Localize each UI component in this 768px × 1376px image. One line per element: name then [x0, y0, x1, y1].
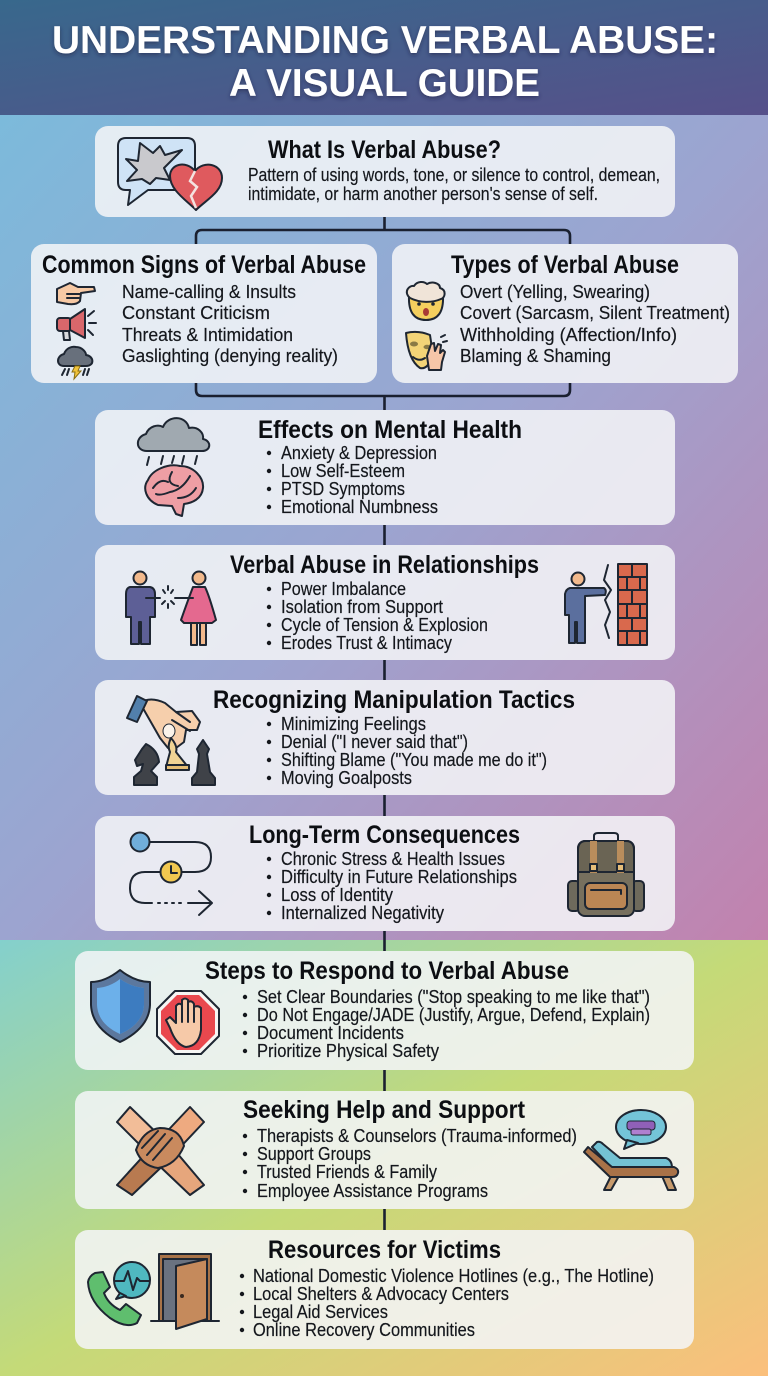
signs list: Gaslighting (denying reality)	[122, 346, 338, 366]
icon: mask and hand	[406, 332, 447, 370]
icon: pointing hand	[57, 283, 95, 304]
heading: Recognizing Manipulation Tactics	[213, 686, 575, 714]
types list: Blaming & Shaming	[460, 346, 611, 366]
panel: relationships	[95, 545, 675, 660]
types list: Covert (Sarcasm, Silent Treatment)	[460, 303, 730, 323]
heading: Steps to Respond to Verbal Abuse	[205, 957, 569, 985]
signs list: Name-calling & Insults	[122, 282, 296, 302]
consequences list	[267, 849, 517, 923]
connectors between panels	[196, 217, 570, 1230]
signs list	[122, 282, 338, 366]
steps list: Do Not Engage/JADE (Justify, Argue, Defend, Explain)	[257, 1005, 650, 1025]
support list: Trusted Friends & Family	[257, 1162, 437, 1182]
heading: Long-Term Consequences	[249, 821, 520, 849]
consequences list: Internalized Negativity	[281, 903, 444, 923]
background: lower section	[0, 940, 768, 1376]
panel: manipulation tactics	[95, 680, 675, 795]
definition text	[248, 165, 660, 204]
icon: exploding head	[407, 282, 445, 320]
definition text: intimidate, or harm another person's sense of self.	[248, 184, 598, 204]
consequences list: Chronic Stress & Health Issues	[281, 849, 505, 869]
header band	[0, 0, 768, 115]
icon: stop hand	[157, 991, 219, 1054]
icon: person facing brick wall	[565, 564, 647, 645]
steps list: Prioritize Physical Safety	[257, 1041, 439, 1061]
panel: steps to respond	[75, 951, 694, 1070]
icon: therapy couch with thought bubble	[584, 1110, 678, 1190]
icon: phone with heartbeat bubble	[88, 1262, 150, 1325]
steps list	[243, 987, 650, 1061]
panel: types	[392, 244, 738, 383]
resources list: Legal Aid Services	[253, 1302, 388, 1322]
tactics list: Minimizing Feelings	[281, 714, 426, 734]
panel: common signs	[31, 244, 377, 383]
types list: Withholding (Affection/Info)	[460, 325, 677, 345]
background: upper section	[0, 115, 768, 940]
tactics list: Shifting Blame ("You made me do it")	[281, 750, 547, 770]
icon: rain cloud over brain	[138, 418, 209, 516]
effects list: Emotional Numbness	[281, 497, 438, 517]
icon: heavy backpack	[568, 833, 644, 916]
title	[52, 19, 718, 105]
panel: what is verbal abuse	[95, 126, 675, 217]
relationships list: Power Imbalance	[281, 579, 406, 599]
support list: Therapists & Counselors (Trauma-informed)	[257, 1126, 577, 1146]
heading: What Is Verbal Abuse?	[268, 136, 501, 164]
support list: Employee Assistance Programs	[257, 1181, 488, 1201]
steps list: Document Incidents	[257, 1023, 404, 1043]
title: UNDERSTANDING VERBAL ABUSE:	[52, 19, 718, 62]
icon: storm cloud	[58, 347, 92, 379]
resources list: Online Recovery Communities	[253, 1320, 475, 1340]
heading: Effects on Mental Health	[258, 416, 522, 444]
support list	[243, 1126, 577, 1201]
panel: seeking help	[75, 1091, 694, 1209]
icon: shield	[91, 970, 150, 1042]
relationships list: Erodes Trust & Intimacy	[281, 633, 452, 653]
heading: Common Signs of Verbal Abuse	[42, 251, 366, 279]
effects list: Anxiety & Depression	[281, 443, 437, 463]
relationships list: Isolation from Support	[281, 597, 443, 617]
icon: clasped hands	[117, 1107, 204, 1195]
icon: speech bubble with burst and broken heart	[118, 138, 222, 210]
effects list: Low Self-Esteem	[281, 461, 405, 481]
relationships list: Cycle of Tension & Explosion	[281, 615, 488, 635]
tactics list	[267, 714, 547, 788]
support list: Support Groups	[257, 1144, 371, 1164]
consequences list: Difficulty in Future Relationships	[281, 867, 517, 887]
consequences list: Loss of Identity	[281, 885, 393, 905]
heading: Types of Verbal Abuse	[451, 251, 679, 279]
definition text: Pattern of using words, tone, or silence to control, demean,	[248, 165, 660, 185]
signs list: Constant Criticism	[122, 303, 270, 323]
resources list: Local Shelters & Advocacy Centers	[253, 1284, 509, 1304]
types list: Overt (Yelling, Swearing)	[460, 282, 650, 302]
tactics list: Denial ("I never said that")	[281, 732, 468, 752]
effects list	[267, 443, 438, 517]
effects list: PTSD Symptoms	[281, 479, 405, 499]
heading: Verbal Abuse in Relationships	[230, 551, 539, 579]
icon: hand moving chess pieces	[127, 696, 215, 785]
heading: Seeking Help and Support	[243, 1096, 526, 1124]
relationships list	[267, 579, 488, 653]
heading: Resources for Victims	[268, 1236, 501, 1264]
icon: open door	[151, 1254, 219, 1329]
icon: megaphone	[57, 309, 96, 340]
resources list	[240, 1266, 654, 1340]
steps list: Set Clear Boundaries ("Stop speaking to me like that")	[257, 987, 650, 1007]
resources list: National Domestic Violence Hotlines (e.g., The Hotline)	[253, 1266, 654, 1286]
panel: resources	[75, 1230, 694, 1349]
tactics list: Moving Goalposts	[281, 768, 412, 788]
panel: long-term consequences	[95, 816, 675, 931]
panel: effects on mental health	[95, 410, 675, 525]
title: A VISUAL GUIDE	[229, 62, 540, 105]
signs list: Threats & Intimidation	[122, 325, 293, 345]
icon: timeline path with clock	[130, 832, 212, 915]
types list	[460, 282, 730, 366]
icon: couple with broken link	[126, 572, 216, 645]
